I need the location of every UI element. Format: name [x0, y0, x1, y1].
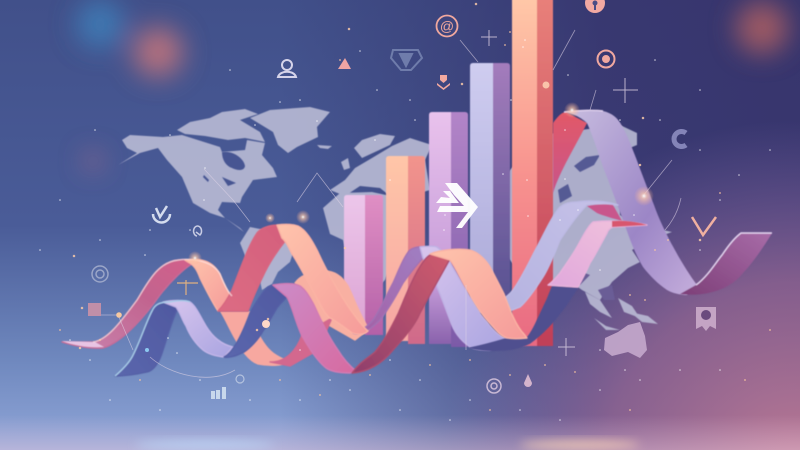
North America: [118, 135, 277, 218]
lilac descent: [564, 110, 697, 295]
icon: small e: [194, 226, 202, 236]
Europe: [330, 138, 432, 200]
icon: square: [88, 303, 101, 316]
icon: ribbon badge: [696, 307, 716, 331]
icon: letter C: [674, 132, 686, 146]
icon: drop: [524, 374, 532, 387]
bokeh lights: [76, 0, 788, 169]
map dark seas: [203, 152, 615, 300]
red fold: [553, 112, 587, 193]
icon: target: [598, 50, 614, 68]
connector lines: [101, 30, 681, 377]
icon: spiral circle: [92, 266, 108, 282]
ribbon: upper left pink to peach: [62, 224, 368, 348]
Asia: [480, 125, 672, 300]
icon: chat: [236, 375, 244, 383]
purple tail: [680, 233, 772, 295]
Canadian islands: [177, 109, 265, 142]
icon: keyhole: [585, 0, 605, 13]
South America: [240, 227, 294, 290]
New Guinea: [630, 312, 658, 324]
icon: at sign: [436, 16, 458, 36]
ribbon: dark blue to pink right: [470, 221, 647, 350]
ribbon: back peach lobes: [221, 271, 369, 366]
ribbon: light blue rising: [500, 201, 622, 312]
ribbon: right lilac wave: [553, 110, 772, 295]
bar 5: [512, 0, 553, 346]
icon: ring: [487, 379, 501, 393]
world map: [118, 107, 672, 330]
icon: shield check: [391, 50, 422, 70]
Africa: [323, 192, 400, 300]
ribbon: lower blue lilac pink crimson: [115, 249, 527, 376]
UK: [341, 158, 350, 170]
icon: person: [278, 60, 296, 77]
ribbon: center purple and lilac: [353, 246, 510, 350]
bar 3: [429, 112, 468, 347]
icon: plus sparkle top: [481, 30, 638, 356]
Greenland: [250, 107, 330, 153]
bar 2: [386, 156, 425, 344]
Central America: [225, 218, 244, 232]
bars: [344, 0, 553, 347]
icon: check chevron: [692, 217, 716, 235]
Australia: [604, 322, 647, 358]
Scandinavia: [354, 134, 395, 158]
icon: small bars: [211, 387, 226, 399]
white arrow icon: [436, 183, 478, 228]
bar 1: [344, 195, 383, 335]
icon: v badge: [153, 206, 170, 222]
icon: at sign: @: [440, 18, 454, 34]
Iceland: [317, 145, 332, 149]
glow points: [116, 82, 654, 352]
icons: [88, 0, 716, 399]
icon: plus: [177, 280, 198, 295]
Southeast Asia: [585, 292, 640, 330]
bar 4: [470, 63, 510, 313]
icon: down arrows: [437, 75, 450, 90]
icon: triangle: [338, 58, 351, 69]
